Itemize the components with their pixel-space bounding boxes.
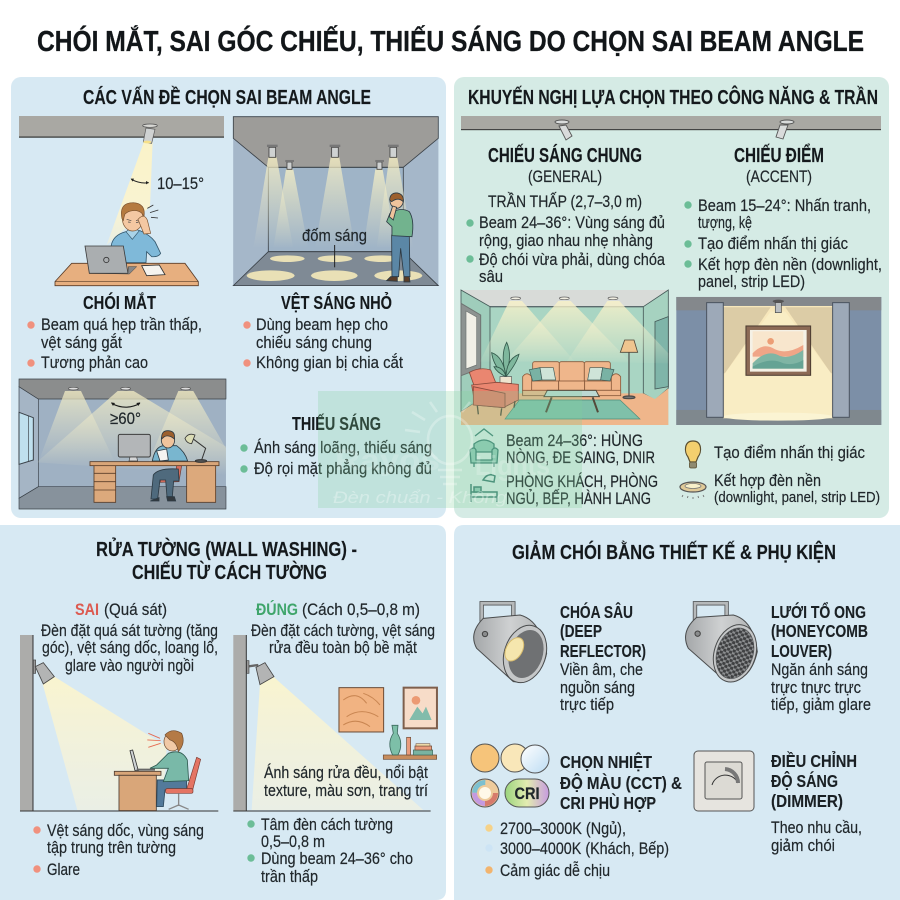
icon: dimmer switch: [694, 751, 754, 811]
right column heading: (Cách 0,5–0,8 m): [302, 601, 420, 619]
angle label: 10–15°: [157, 174, 204, 193]
right column heading: ĐÚNG: [256, 600, 298, 619]
office chair: [160, 466, 182, 482]
text: wrong description: góc), vệt sáng dốc, loang lổ,: [42, 639, 218, 657]
text: CCT and CRI: 3000–4000K (Khách, Bếp): [500, 840, 669, 858]
wrong column heading: (Quá sát): [104, 601, 167, 619]
bullets: right: Dùng beam 24–36° cho: [261, 850, 413, 868]
person at desk: [114, 771, 161, 811]
panel heading: GIẢM CHÓI BẰNG THIẾT KẾ & PHỤ KIỆN: [512, 540, 836, 564]
watermark: Rayos: [335, 444, 440, 477]
text: general usage with icons: [470, 429, 658, 508]
watermark: Đèn chuẩn - Không: [333, 488, 508, 507]
angle label: ≥60°: [110, 409, 141, 428]
text: dimmer: giảm chói: [771, 837, 835, 855]
textured art panel: [339, 688, 384, 732]
text: accent usage with icons: Tạo điểm nhấn thị giác: [714, 444, 865, 462]
text: dimmer: [771, 750, 862, 855]
bullets: wrong: [33, 822, 204, 879]
text: accent recommendations: [684, 197, 882, 291]
panel heading: RỬA TƯỜNG (WALL WASHING) -: [96, 537, 357, 561]
watermark: [318, 391, 582, 508]
panel heading: CHIẾU TỪ CÁCH TƯỜNG: [132, 560, 327, 584]
text: accent recommendations: Beam 15–24°: Nhấn tranh,: [698, 197, 871, 215]
illustration: room with small spots: [233, 117, 438, 286]
column heading: general: CHIẾU SÁNG CHUNG: [488, 144, 642, 167]
bullets: right: [247, 816, 413, 886]
text: accent recommendations: Kết hợp đèn nền (downlight,: [698, 256, 882, 274]
text: thiếu sáng: [240, 413, 432, 478]
text: accent recommendations: Tạo điểm nhấn thị giác: [698, 235, 848, 253]
text: dimmer: Theo nhu cầu,: [771, 819, 862, 837]
text: dimmer: (DIMMER): [771, 791, 843, 811]
text: general recommendations: [466, 192, 666, 286]
text: vệt sáng nhỏ: [243, 292, 403, 372]
panel: wall washing: [0, 525, 446, 900]
bullets: right: trần thấp: [261, 868, 318, 886]
ceiling track with two lamps: [461, 116, 881, 140]
text: right description: rửa đều toàn bộ bề mặt: [269, 639, 417, 657]
text: honeycomb louver: [771, 601, 871, 714]
icon: armchair: [470, 429, 498, 467]
column heading: accent: CHIẾU ĐIỂM: [734, 144, 824, 167]
text: general recommendations: rộng, giao nhau nhẹ nhàng: [479, 232, 653, 250]
text: deep reflector: REFLECTOR): [560, 641, 646, 661]
column heading: general: (GENERAL): [528, 168, 602, 186]
text: honeycomb louver: LOUVER): [771, 641, 832, 661]
right column heading: [256, 600, 420, 619]
text: thiếu sáng: Ánh sáng loãng, thiếu sáng: [254, 438, 432, 457]
text: general recommendations: Độ chói vừa phải, dùng chóa: [479, 251, 666, 269]
bullets: wrong: Glare: [47, 861, 80, 879]
text: dimmer: ĐỘ SÁNG: [771, 770, 838, 791]
panel: recommendations by function and ceiling: [454, 77, 889, 518]
text: vệt sáng nhỏ: chiếu sáng chung: [256, 334, 372, 352]
text: chói mắt: vệt sáng gắt: [41, 333, 122, 352]
text: CCT and CRI: 2700–3000K (Ngủ),: [500, 820, 626, 838]
coffee table: [544, 390, 599, 412]
illustration: living room: [461, 290, 668, 425]
illustration: wall light at correct distance: [233, 635, 437, 811]
text: CCT and CRI: [485, 751, 682, 880]
text: wrong description: Đèn đặt quá sát tường (tăng: [41, 622, 218, 640]
text: right description: Đèn đặt cách tường, vệt sáng: [251, 622, 435, 640]
text: deep reflector: nguồn sáng: [560, 679, 635, 697]
text: general recommendations: TRẦN THẤP (2,7–3,0 m): [488, 192, 642, 211]
illustration: wide beam under-lit office: [19, 379, 226, 509]
icon: downlight ring: [680, 482, 706, 499]
text: accent usage with icons: Kết hợp đèn nền: [714, 472, 821, 490]
text: chói mắt: Tương phản cao: [41, 354, 148, 372]
text: wash effect: [264, 763, 428, 800]
text: general usage with icons: NÒNG, ĐE SAING, DNIR: [506, 448, 655, 467]
panel: reduce glare by design and accessories: [454, 525, 900, 900]
text: vệt sáng nhỏ: Không gian bị chia cắt: [256, 353, 403, 372]
text: deep reflector: Viền âm, che: [560, 661, 643, 679]
text: thiếu sáng: THIẾU SÁNG: [292, 413, 381, 434]
text: accent usage with icons: [680, 441, 880, 506]
text: accent recommendations: panel, strip LED): [698, 273, 805, 291]
illustration: wall light too close: [20, 635, 218, 811]
text: honeycomb louver: trực tnực trực: [771, 679, 861, 697]
wrong column heading: [75, 601, 167, 619]
icon: deep reflector lamp: [474, 603, 554, 688]
panel heading: [96, 537, 357, 584]
person: [150, 431, 188, 501]
text: chói mắt: Beam quá hẹp trần thấp,: [41, 316, 202, 334]
framed picture: [404, 688, 437, 728]
text: general recommendations: Beam 24–36°: Vùng sáng đủ: [479, 214, 665, 232]
illustration: glare at desk: [19, 116, 224, 286]
CRI label: CRI: [514, 785, 540, 803]
text: honeycomb louver: Ngăn ánh sáng: [771, 661, 868, 679]
desk lamp: [192, 438, 207, 462]
text: wash effect: Ánh sáng rửa đều, nổi bật: [264, 763, 428, 782]
person: [387, 193, 413, 282]
text: wrong description: glare vào người ngồi: [65, 657, 194, 675]
bullets: wrong: tập trung trên tường: [47, 839, 176, 857]
text: deep reflector: trực tiếp: [560, 696, 614, 714]
callout: đốm sáng: đốm sáng: [302, 227, 367, 245]
text: deep reflector: (DEEP: [560, 621, 602, 641]
text: accent usage with icons: (downlight, panel, strip LED): [714, 489, 880, 506]
text: right description: [251, 622, 435, 657]
panel heading: CÁC VẤN ĐỀ CHỌN SAI BEAM ANGLE: [83, 86, 371, 109]
wrong column heading: SAI: [75, 601, 99, 619]
text: honeycomb louver: tiếp, giảm glare: [771, 696, 871, 714]
column heading: accent: [734, 144, 824, 186]
sofa: [523, 362, 621, 396]
desk: [94, 465, 216, 502]
bullets: right: 0,5–0,8 m: [261, 833, 325, 851]
text: general usage with icons: Beam 24–36°: HÙNG: [506, 431, 643, 450]
text: vệt sáng nhỏ: VỆT SÁNG NHỎ: [281, 292, 392, 313]
text: general usage with icons: PHÒNG KHÁCH, PHÒNG: [506, 472, 658, 491]
text: deep reflector: [560, 601, 646, 714]
text: thiếu sáng: Độ rọi mặt phẳng không đủ: [254, 459, 432, 478]
shelf and decor: [383, 755, 437, 759]
text: honeycomb louver: (HONEYCOMB: [771, 621, 868, 641]
bullets: wrong: Vệt sáng dốc, vùng sáng: [47, 822, 204, 840]
column heading: accent: (ACCENT): [746, 168, 812, 186]
text: CCT and CRI: ĐỘ MÀU (CCT) &: [560, 772, 682, 793]
floor lamp: [623, 352, 635, 399]
text: CCT and CRI: CRI PHÙ HỢP: [560, 792, 656, 813]
panel: beam angle problems: [11, 77, 446, 518]
column heading: general: [488, 144, 642, 186]
illustration: accent-lit painting: [676, 297, 881, 425]
icon: bed with lamp: [471, 475, 497, 502]
text: wrong description: [41, 622, 218, 675]
text: vệt sáng nhỏ: Dùng beam hẹp cho: [256, 316, 388, 334]
text: honeycomb louver: LƯỚI TỔ ONG: [771, 601, 866, 622]
text: wash effect: texture, màu sơn, trang trí: [264, 782, 428, 800]
text: accent recommendations: tượng, kệ: [698, 214, 752, 232]
text: general usage with icons: NGỦ, BẾP, HÀNH LANG: [506, 489, 651, 508]
monitor: [118, 434, 150, 457]
icon: light bulb: [685, 441, 701, 468]
icon: honeycomb louver lamp: [686, 603, 764, 688]
watermark: Lights: [475, 450, 550, 481]
bullets: right: Tâm đèn cách tường: [261, 816, 393, 834]
icon: colour temperature and CRI swatches: [471, 744, 549, 807]
text: chói mắt: CHÓI MẮT: [83, 292, 156, 313]
rug: [505, 400, 640, 419]
text: CCT and CRI: Cảm giác dễ chịu: [500, 861, 610, 880]
armchair: [469, 369, 518, 408]
text: chói mắt: [27, 292, 202, 372]
plant: [492, 342, 519, 377]
text: CCT and CRI: CHỌN NHIỆT: [560, 751, 652, 772]
text: deep reflector: CHÓA SÂU: [560, 601, 633, 622]
text: dimmer: ĐIỀU CHỈNH: [771, 750, 857, 771]
text: general recommendations: sâu: [479, 268, 503, 286]
